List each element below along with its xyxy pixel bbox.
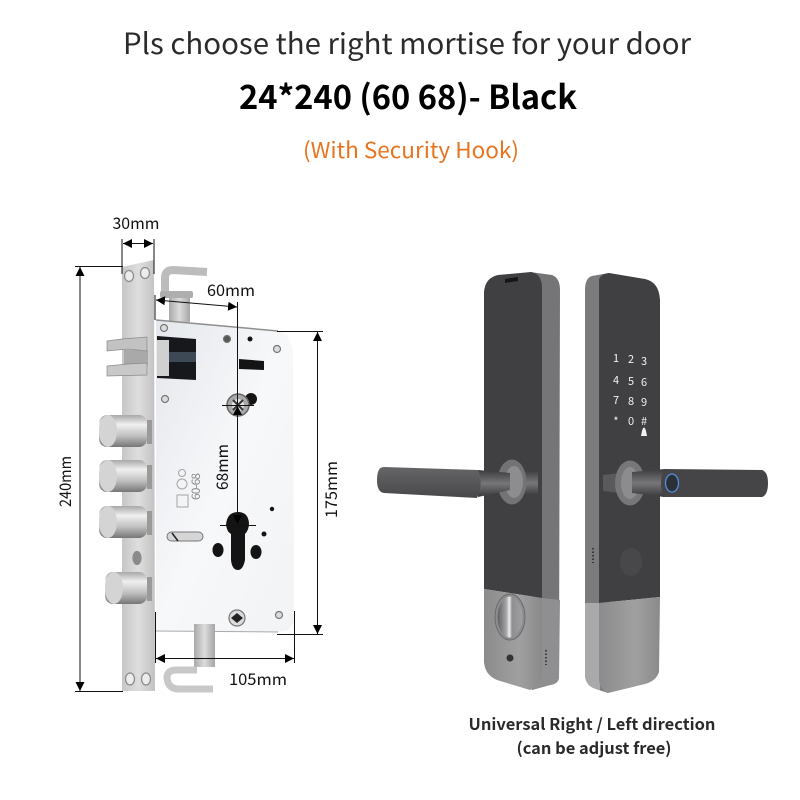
engraved mark: 60-68 [187,473,204,500]
top hook [160,270,207,322]
caption: (can be adjust free) [516,735,672,759]
slanted slot [167,532,203,541]
side edge [585,273,609,693]
model heading: 24*240 (60 68)- Black [239,71,577,119]
smart lock: front view [585,273,768,693]
keypad: # [641,413,647,429]
keypad: * [613,413,619,429]
lock case [156,320,294,632]
slots and holes [212,336,274,570]
keypad: 3 [641,353,647,369]
dimension: 68mm [220,302,256,526]
keypad: 1 [613,350,619,366]
keypad: 5 [628,373,634,389]
front panel [599,273,660,603]
dimension: 30mm [122,239,154,274]
keypad: 8 [628,393,634,409]
spindle hub [227,394,249,416]
latch bolt [107,337,148,376]
cylinder bolts [99,415,152,604]
keypad: 9 [641,394,647,410]
bottom hook [167,624,215,689]
handle [377,460,538,504]
keypad: 0 [628,413,634,429]
label: 68mm: 68mm [209,444,233,490]
back panel [484,272,542,598]
lower side edge [585,603,600,690]
security hook note: (With Security Hook) [303,133,519,165]
label: 175mm: 175mm [318,461,342,518]
dimension: 105mm [156,611,294,663]
caption [468,711,716,759]
key hole [506,654,514,662]
faceplate [122,260,155,691]
dimension: 60mm [155,295,237,320]
label: 30mm: 30mm [112,210,160,234]
thumb turn [495,594,525,640]
faceplate screw holes [124,268,150,685]
smart lock: back view [377,272,560,690]
engraved logo [177,470,188,507]
dimension: 240mm [75,266,123,692]
top slot [505,277,518,283]
keypad: 6 [641,374,647,390]
dimension: 175mm [277,332,323,634]
lower panel [599,597,660,693]
label: 60mm: 60mm [207,277,255,301]
handle [603,460,768,506]
speaker dots [545,650,547,665]
bottom screw slot [231,613,243,623]
mortise lock diagram [99,260,294,691]
case screws [160,324,282,626]
keypad: 4 [613,372,619,388]
label: 105mm: 105mm [229,666,287,690]
label: 240mm: 240mm [52,456,76,507]
dimension lines [75,239,323,692]
doorbell icon [641,428,647,436]
face recognition area [620,548,642,576]
lower side edge [532,598,560,690]
keypad [613,350,647,429]
case window [157,336,196,380]
caption: Universal Right / Left direction [468,711,716,735]
keypad: 2 [628,351,634,367]
side edge [530,272,560,690]
fingerprint sensor [666,474,678,492]
keypad: 7 [613,392,619,408]
title: Pls choose the right mortise for your door [123,21,692,63]
side speaker dots [592,548,594,563]
lower panel [484,589,542,690]
